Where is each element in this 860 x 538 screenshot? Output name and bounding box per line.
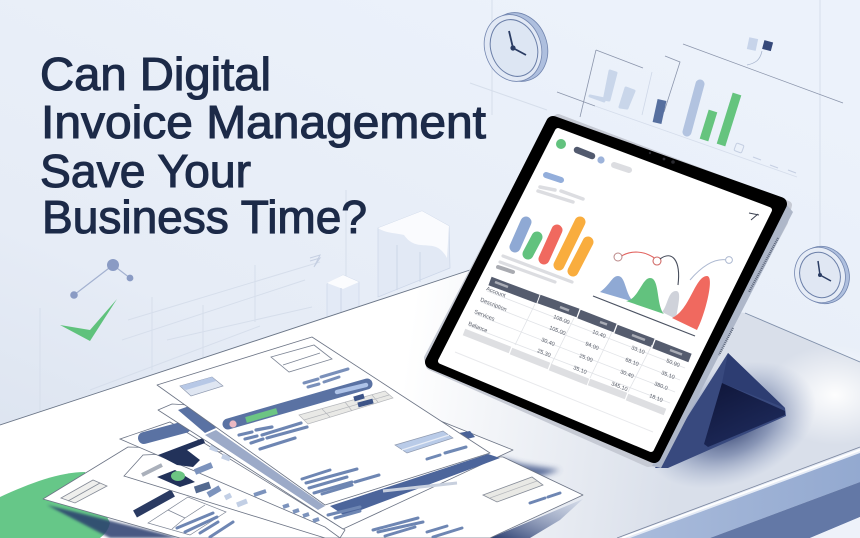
table labels: 50.90 bbox=[665, 358, 680, 369]
table labels: 10.40 bbox=[591, 329, 606, 340]
table labels: Services bbox=[473, 309, 495, 323]
title bbox=[40, 48, 486, 243]
tablet cameras bbox=[649, 152, 675, 164]
table labels: 35.10 bbox=[572, 365, 587, 376]
table labels: 30.40 bbox=[540, 337, 555, 348]
table labels: 94.00 bbox=[584, 341, 599, 352]
table header bbox=[490, 281, 690, 358]
table labels: 345.10 bbox=[610, 381, 628, 393]
invoice logo box bbox=[180, 377, 223, 396]
icon: green check mark bbox=[60, 299, 117, 341]
table labels: Balance bbox=[467, 321, 488, 334]
tablet shadow bbox=[625, 338, 835, 512]
tablet screen bbox=[441, 131, 769, 449]
title: Business Time? bbox=[42, 191, 367, 243]
screen table bbox=[455, 281, 690, 432]
table labels: Account bbox=[485, 286, 506, 300]
title: Invoice Management bbox=[41, 96, 486, 148]
small cube bbox=[327, 275, 359, 318]
background grid lines bbox=[40, 0, 820, 445]
bar chart: background bbox=[557, 37, 843, 177]
tablet bbox=[428, 118, 793, 468]
invoice: fourth sheet bbox=[124, 450, 340, 538]
table labels: 35.10 bbox=[660, 370, 675, 381]
desk surface bbox=[0, 270, 860, 538]
table labels: 68.10 bbox=[624, 357, 639, 368]
table labels bbox=[467, 286, 680, 404]
tablet frame bbox=[428, 118, 788, 463]
screen nav bbox=[538, 139, 629, 202]
address box bbox=[61, 480, 107, 503]
clock: top bbox=[475, 4, 557, 90]
table labels: 25.30 bbox=[536, 348, 551, 359]
dark bar bbox=[135, 493, 173, 514]
title: Can Digital bbox=[40, 48, 271, 100]
screen area chart bbox=[593, 213, 759, 336]
table labels: 25.00 bbox=[578, 353, 593, 364]
icon: network nodes bbox=[70, 259, 133, 299]
green desk blob bbox=[0, 472, 110, 538]
mini table bbox=[148, 497, 226, 535]
invoice: third sheet bbox=[120, 422, 345, 538]
tablet bezel bbox=[432, 123, 780, 456]
tablet side speakers bbox=[719, 238, 778, 355]
invoice: top sheet bbox=[157, 337, 490, 505]
table labels: Description bbox=[479, 297, 507, 313]
table labels: 30.40 bbox=[619, 369, 634, 380]
table footer bbox=[464, 332, 665, 412]
tablet stand bbox=[655, 353, 786, 468]
invoice: second sheet bbox=[158, 404, 513, 529]
table grid bbox=[469, 291, 685, 403]
table labels: 108.00 bbox=[552, 314, 570, 326]
table labels: 33.10 bbox=[630, 345, 645, 356]
large box chart bbox=[378, 211, 450, 297]
invoice total box bbox=[395, 431, 453, 453]
invoice: bottom sheet bbox=[43, 447, 583, 538]
invoice address box bbox=[271, 345, 332, 372]
invoice header band bbox=[228, 384, 367, 428]
invoice table bbox=[299, 391, 393, 424]
table labels: 105.00 bbox=[548, 325, 566, 337]
title: Save Your bbox=[40, 145, 251, 197]
screen bar chart bbox=[498, 222, 588, 282]
total box bbox=[483, 477, 543, 502]
table labels: 18.10 bbox=[648, 393, 663, 404]
clock: right bbox=[787, 239, 857, 311]
table labels: 380.0 bbox=[653, 381, 668, 392]
desk front edge bbox=[617, 447, 860, 538]
